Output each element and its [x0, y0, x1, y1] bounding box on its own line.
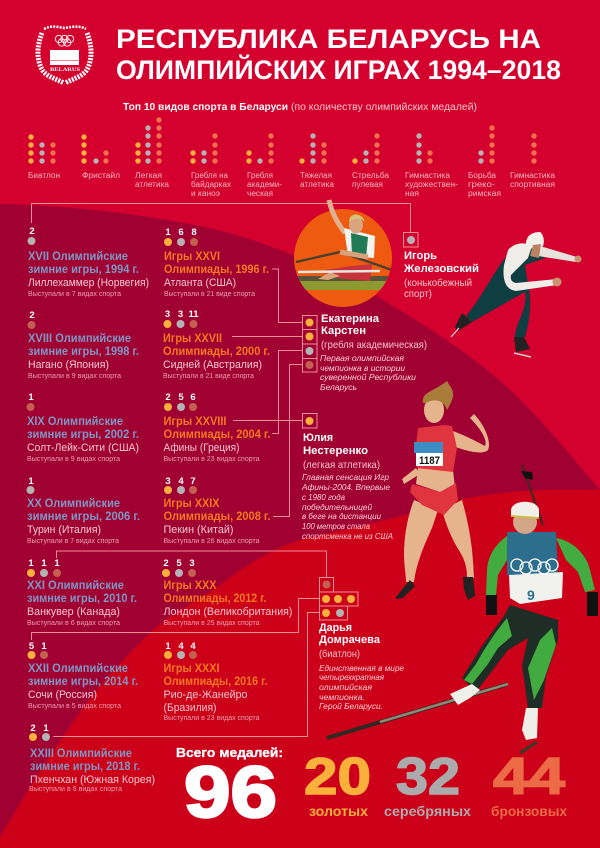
1998: Выступали в 9 видах спорта	[28, 373, 121, 380]
2010: XXI Олимпийские	[27, 580, 124, 592]
icon: olympic committee emblem	[38, 27, 91, 83]
rhythmic gymnastics: художествен-	[405, 180, 458, 189]
photo: biathlete	[327, 465, 598, 753]
bio: Yulia Nesterenko	[301, 432, 393, 541]
2000: 3	[165, 309, 170, 320]
2010: Ванкувер (Канада)	[27, 606, 120, 618]
2004: Выступали в 23 видах спорта	[164, 456, 260, 463]
2002: 1	[28, 392, 34, 403]
1996	[164, 227, 269, 298]
silver total: 32	[396, 748, 460, 806]
bio: Darya Domracheva: (биатлон)	[319, 648, 360, 660]
2014: XXII Олимпийские	[28, 663, 128, 675]
bio: Ekaterina Karsten: суверенной Республики	[320, 373, 417, 382]
1996: 8	[191, 227, 197, 238]
1998	[28, 310, 139, 380]
bio: Igor Zhelezovsky	[403, 250, 479, 300]
bronze total	[491, 748, 567, 819]
2012: Лондон (Великобритания)	[164, 606, 292, 618]
2012: 3	[189, 558, 195, 569]
wrestling: римская	[468, 189, 501, 198]
2018: Выступали в 6 видах спорта	[29, 786, 122, 793]
2014: 1	[41, 641, 47, 652]
2018	[29, 723, 155, 793]
rowing: Гребля	[247, 171, 273, 180]
2000: Сидней (Австралия)	[163, 359, 262, 371]
freestyle	[81, 134, 120, 180]
2012: 2	[163, 558, 169, 569]
bio: Yulia Nesterenko: Афины-2004. Впервые	[301, 483, 391, 492]
bio: Ekaterina Karsten: Первая олимпийская	[320, 354, 405, 363]
connector lines	[32, 204, 410, 736]
biathlon: Биатлон	[28, 171, 60, 180]
2010: зимние игры, 2010 г.	[27, 593, 137, 605]
2012: Олимпиады, 2012 г.	[164, 593, 266, 605]
silver total	[384, 748, 471, 819]
2008: Выступали в 26 видах спорта	[164, 538, 260, 545]
2018: Пхенчхан (Южная Корея)	[30, 774, 155, 786]
bio: Ekaterina Karsten	[320, 313, 427, 392]
weightlifting	[299, 133, 335, 189]
2018: зимние игры, 2018 г.	[30, 761, 140, 773]
2002: зимние игры, 2002 г.	[27, 429, 139, 441]
2014: Выступали в 5 видах спорта	[28, 703, 121, 710]
2004: 5	[178, 392, 184, 403]
bio: Yulia Nesterenko: Главная сенсация Игр	[302, 473, 390, 482]
icon: olympic committee emblem: BELARUS	[50, 67, 80, 73]
2008	[164, 476, 270, 545]
1996: 6	[178, 227, 184, 238]
athletics: атлетика	[135, 180, 170, 189]
2002	[26, 392, 139, 463]
1994: XVII Олимпийские	[28, 251, 128, 263]
total medals: Всего медалей:	[176, 745, 283, 760]
subtitle	[123, 102, 477, 113]
bio: Ekaterina Karsten: Беларусь	[320, 383, 357, 392]
bio: Ekaterina Karsten: чемпионка в истории	[320, 364, 406, 373]
1998: зимние игры, 1998 г.	[28, 346, 139, 358]
2018: XXIII Олимпийские	[30, 748, 132, 760]
2012: 5	[176, 558, 182, 569]
title	[116, 24, 561, 85]
2006: XX Олимпийские	[27, 498, 120, 510]
2010: 1	[54, 558, 60, 569]
bio: Darya Domracheva: четырехкратная	[319, 673, 385, 682]
2006: Турин (Италия)	[27, 524, 101, 536]
rowing: академи-	[247, 180, 282, 189]
2012: Игры XXX	[164, 580, 217, 592]
canoe	[190, 133, 231, 198]
1996: Игры XXVI	[164, 251, 220, 263]
2014: зимние игры, 2014 г.	[28, 676, 138, 688]
2000: 3	[178, 309, 183, 320]
1996: Выступали в 21 виде спорта	[164, 291, 255, 298]
badges: Karsten medals	[302, 316, 317, 372]
games column: winter	[26, 226, 155, 793]
bio: Igor Zhelezovsky: Игорь	[404, 250, 437, 262]
bio: Yulia Nesterenko: 100 метров стала	[302, 522, 371, 531]
gold total: 20	[304, 748, 371, 806]
2016: Игры XXXI	[164, 663, 220, 675]
bio: Yulia Nesterenko: победительницей	[302, 503, 373, 512]
bio: Darya Domracheva: олимпийская	[319, 683, 373, 692]
chart: top 10 sports by medals	[28, 117, 556, 198]
games column: summer	[162, 227, 292, 722]
2012: Выступали в 25 видах спорта	[164, 620, 260, 627]
2002: Солт-Лейк-Сити (США)	[27, 442, 139, 454]
2004: Игры XXVIII	[164, 416, 226, 428]
bio: Ekaterina Karsten: Карстен	[321, 325, 366, 337]
bio: Yulia Nesterenko: Нестеренко	[303, 445, 368, 457]
photo: rower in orange circle	[294, 200, 392, 307]
athletics	[135, 117, 170, 189]
photo: sprinter: 1187	[419, 455, 440, 467]
2002: Выступали в 9 видах спорта	[27, 456, 120, 463]
2014: Сочи (Россия)	[28, 689, 97, 701]
1994	[28, 226, 149, 298]
bio: Ekaterina Karsten: (гребля академическая)	[321, 339, 427, 351]
1994: зимние игры, 1994 г.	[28, 264, 139, 276]
2000: 11	[188, 309, 199, 320]
2000: Выступали в 21 виде спорта	[163, 373, 254, 380]
rhythmic gymnastics	[405, 133, 458, 198]
shooting: Стрельба	[352, 171, 390, 180]
bio: Darya Domracheva: Дарья	[319, 622, 352, 634]
badge: Nesterenko medal	[302, 414, 317, 428]
shooting	[352, 133, 390, 189]
2016	[164, 641, 268, 722]
gold total: золотых	[309, 803, 368, 819]
shooting: пулевая	[352, 180, 383, 189]
1996: 1	[165, 227, 171, 238]
bio: Darya Domracheva: Единственная в мире	[319, 664, 405, 673]
1996: Олимпиады, 1996 г.	[164, 264, 269, 276]
photo: sprinter	[396, 381, 489, 600]
bio: Ekaterina Karsten: Екатерина	[321, 313, 380, 325]
artistic gymnastics: Гимнастика	[510, 171, 556, 180]
title: РЕСПУБЛИКА БЕЛАРУСЬ НА	[116, 24, 541, 54]
2016: 4	[178, 641, 184, 652]
1994: Выступали в 7 видах спорта	[28, 291, 121, 298]
2006	[26, 476, 140, 545]
rhythmic gymnastics: ная	[405, 189, 419, 198]
2004: 6	[190, 392, 196, 403]
2008: Олимпиады, 2008 г.	[164, 511, 270, 523]
bronze total: 44	[493, 748, 565, 806]
2002: XIX Олимпийские	[27, 416, 123, 428]
1994: Лиллехаммер (Норвегия)	[28, 277, 149, 289]
2016: 4	[190, 641, 196, 652]
subtitle: (по количеству олимпийских медалей)	[291, 102, 477, 113]
2014: 5	[29, 641, 35, 652]
2016: Выступали в 23 видах спорта	[164, 715, 260, 722]
2016: 1	[165, 641, 171, 652]
2004: Олимпиады, 2004 г.	[164, 429, 270, 441]
2018: 1	[43, 723, 49, 734]
2008: 4	[178, 476, 184, 487]
2004: Афины (Греция)	[164, 442, 240, 454]
badges: Domracheva medals	[320, 578, 358, 620]
artistic gymnastics	[510, 133, 556, 189]
canoe: байдарках	[191, 180, 231, 189]
1998: XVIII Олимпийские	[28, 333, 131, 345]
2000: Игры XXVII	[163, 333, 222, 345]
rowing	[246, 133, 282, 198]
artistic gymnastics: спортивная	[510, 180, 555, 189]
silver total: серебряных	[384, 803, 471, 819]
photo: biathlete: 9	[527, 587, 535, 603]
wrestling: греко-	[468, 180, 495, 189]
title: ОЛИМПИЙСКИХ ИГРАХ 1994–2018	[116, 55, 561, 85]
bio: Darya Domracheva: чемпионка.	[319, 693, 365, 702]
bio: Yulia Nesterenko: спортсменка не из США	[302, 532, 393, 541]
total medals: 96	[184, 753, 277, 833]
2004	[164, 392, 270, 463]
canoe: и каноэ	[191, 189, 220, 198]
bio: Igor Zhelezovsky: спорт)	[404, 288, 432, 300]
2008: 7	[190, 476, 196, 487]
1994: 2	[29, 226, 35, 237]
weightlifting: атлетика	[300, 180, 335, 189]
2008: 3	[165, 476, 171, 487]
2010	[27, 558, 137, 627]
1998: Нагано (Япония)	[28, 359, 109, 371]
biathlon	[28, 134, 60, 180]
2016: Олимпиады, 2016 г.	[164, 676, 268, 688]
bio: Darya Domracheva	[319, 622, 405, 711]
bio: Yulia Nesterenko: Юлия	[303, 432, 333, 444]
bio: Darya Domracheva: Домрачева	[319, 634, 381, 646]
freestyle: Фристайл	[82, 171, 120, 180]
bio: Yulia Nesterenko: с 1980 года	[302, 493, 346, 502]
2016: (Бразилия)	[164, 702, 216, 714]
rowing: ческая	[247, 189, 273, 198]
2016: Рио-де-Жанейро	[164, 689, 248, 701]
bio: Yulia Nesterenko: в беге на дистанции	[302, 512, 382, 521]
2004: 2	[165, 392, 171, 403]
2018: 2	[30, 723, 36, 734]
photo: speed skater	[451, 232, 582, 357]
total medals	[176, 745, 283, 833]
wrestling: Борьба	[468, 171, 497, 180]
bio: Darya Domracheva: Герой Беларуси.	[319, 702, 383, 711]
2006: Выступали в 7 видах спорта	[27, 538, 119, 545]
2010: 1	[28, 558, 34, 569]
2012	[162, 558, 292, 627]
weightlifting: Тяжелая	[300, 171, 332, 180]
bio: Igor Zhelezovsky: Железовский	[403, 263, 479, 275]
rhythmic gymnastics: Гимнастика	[405, 171, 451, 180]
2000	[163, 309, 270, 380]
badge: Zhelezovsky medal	[404, 232, 418, 247]
wrestling	[468, 125, 501, 198]
2008: Игры XXIX	[164, 498, 220, 510]
bio: Yulia Nesterenko: (легкая атлетика)	[303, 459, 380, 471]
1998: 2	[29, 310, 35, 321]
2008: Пекин (Китай)	[164, 524, 234, 536]
1996: Атланта (США)	[164, 277, 236, 289]
2010: Выступали в 6 видах спорта	[27, 620, 120, 627]
subtitle: Топ 10 видов спорта в Беларуси	[123, 102, 288, 113]
2014	[28, 641, 138, 710]
2000: Олимпиады, 2000 г.	[163, 346, 270, 358]
bronze total: бронзовых	[491, 803, 567, 819]
canoe: Гребля на	[191, 171, 229, 180]
2006: 1	[28, 476, 34, 487]
bio: Igor Zhelezovsky: (конькобежный	[404, 277, 472, 289]
2010: 1	[41, 558, 47, 569]
2006: зимние игры, 2006 г.	[27, 511, 140, 523]
athletics: Легкая	[135, 171, 162, 180]
